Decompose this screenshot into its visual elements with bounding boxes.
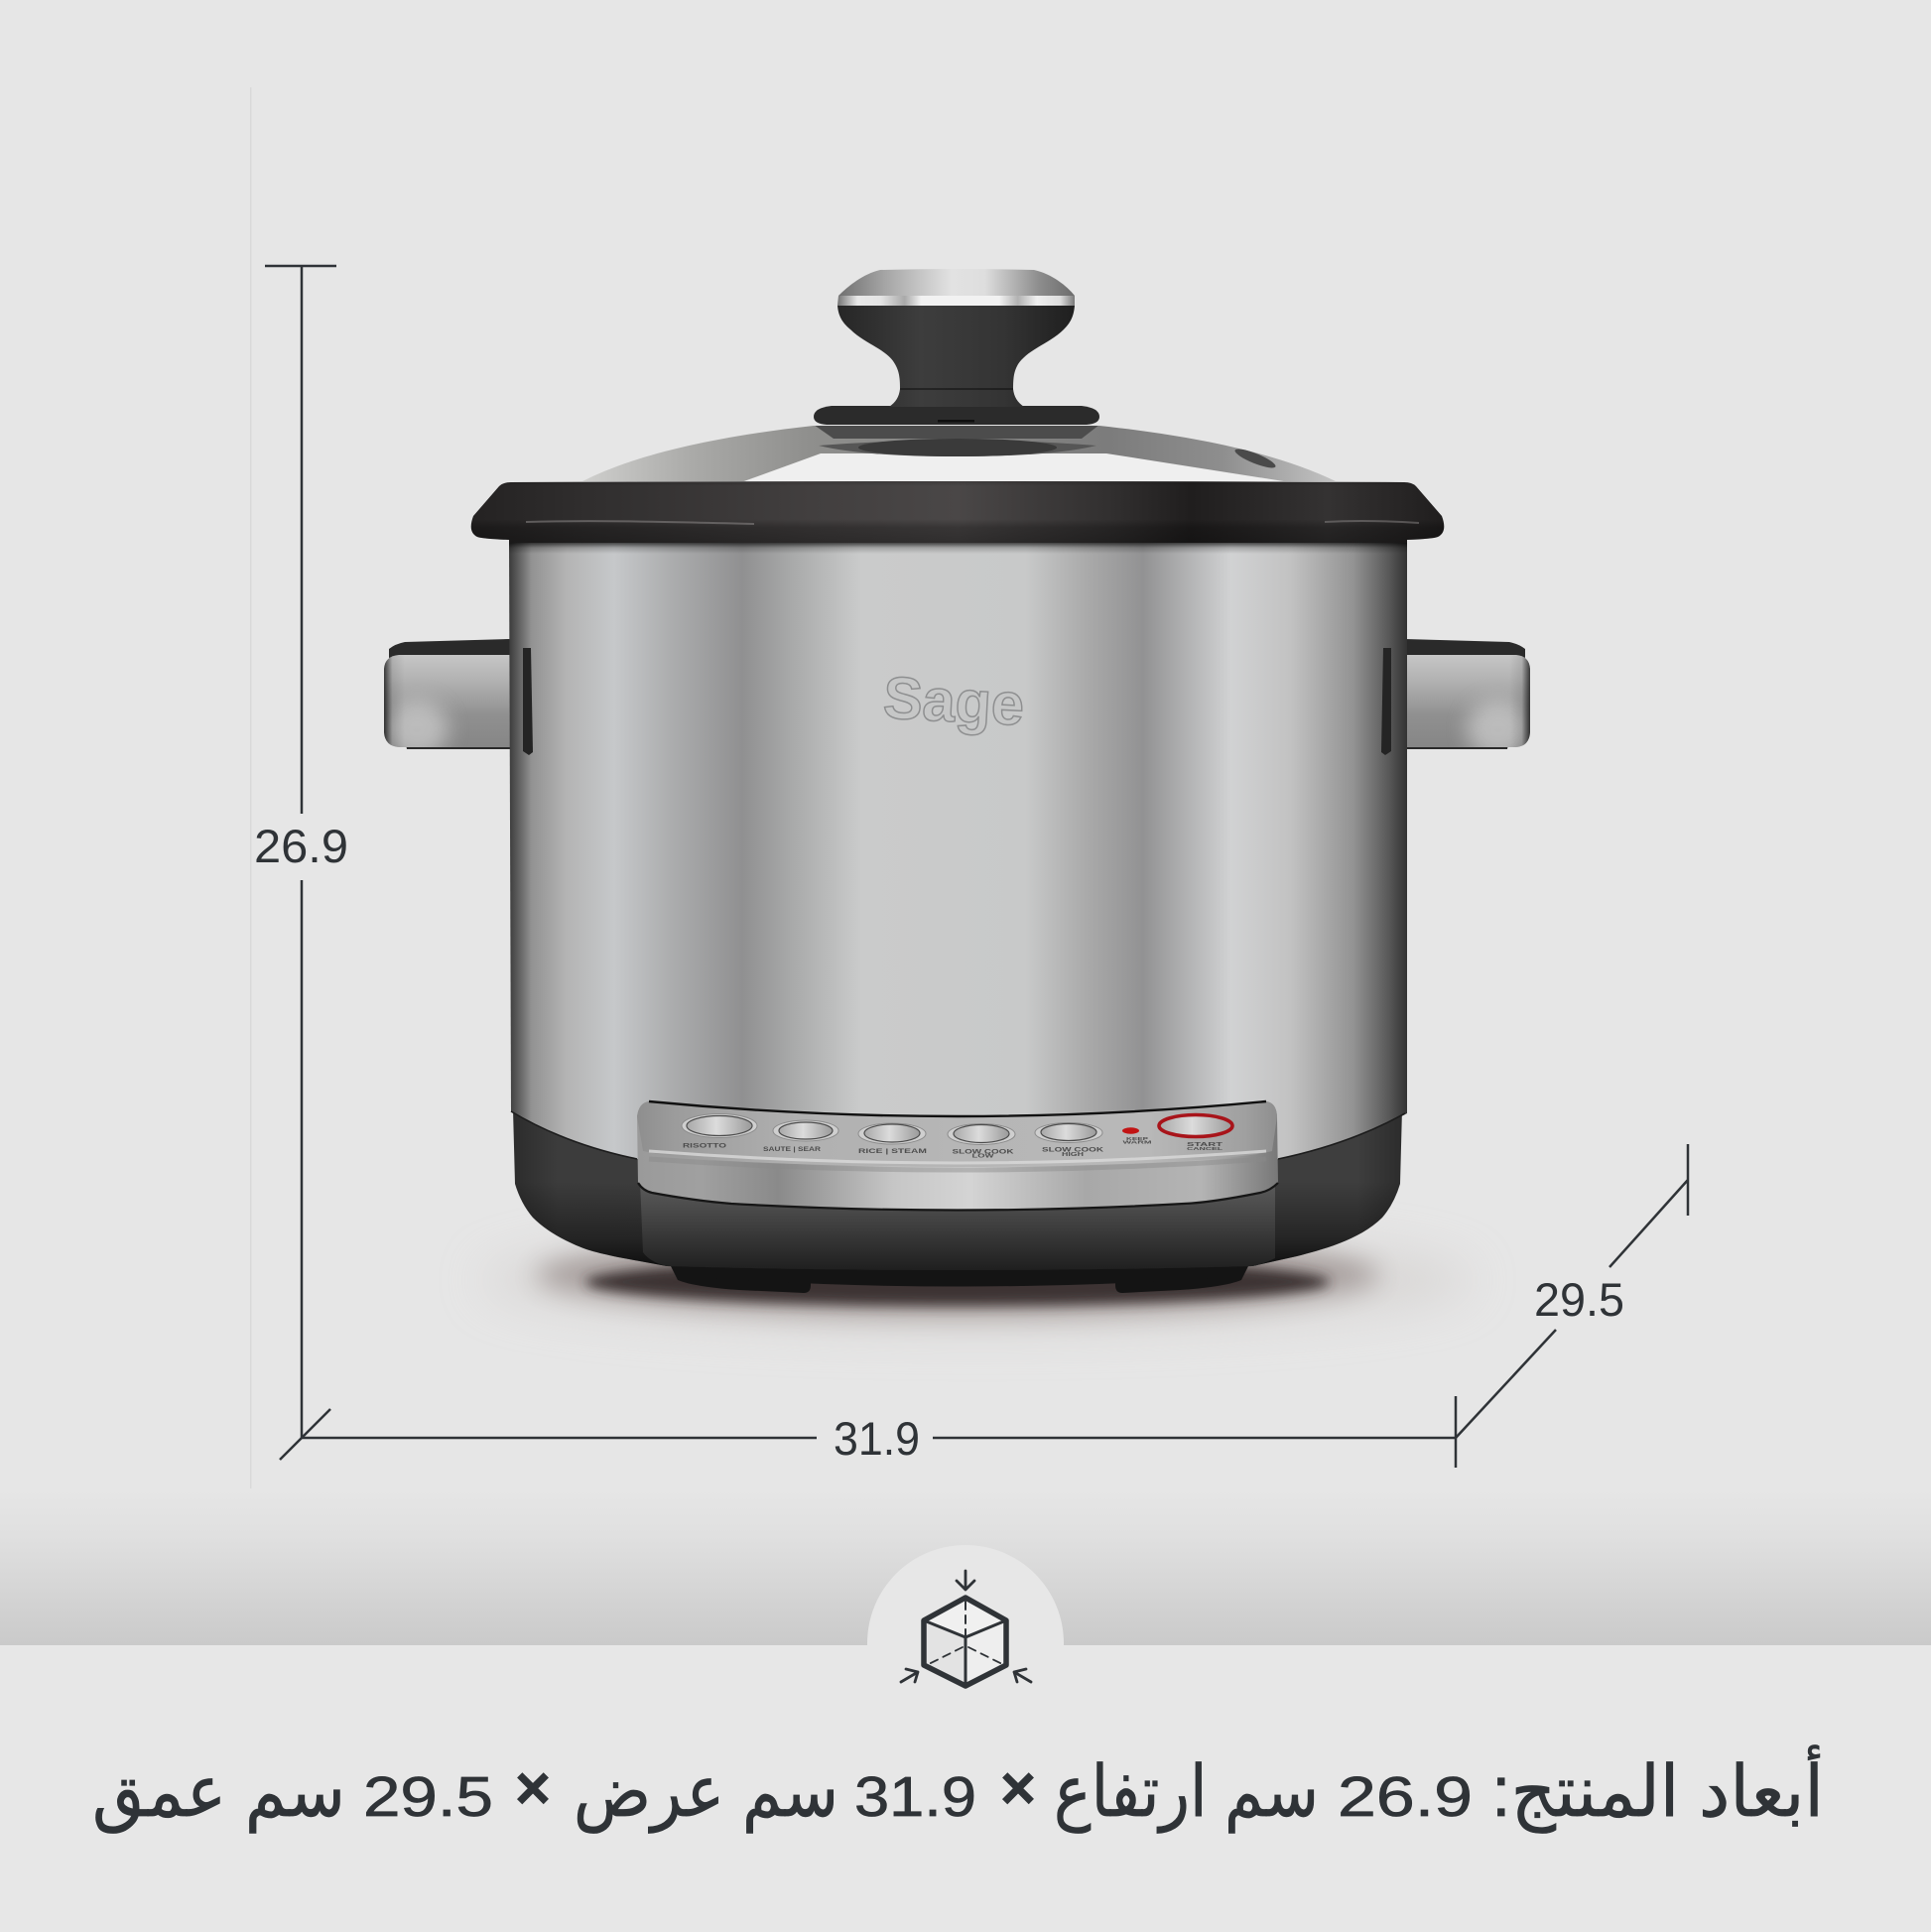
caption panel xyxy=(0,1645,1931,1932)
dimension: depth 29.5 xyxy=(280,1144,1688,1460)
dimension: height 26.9: 26.9 xyxy=(254,820,348,872)
button labels: RISOTTO xyxy=(683,1143,727,1149)
feet xyxy=(667,1258,1252,1293)
button: slow cook low xyxy=(948,1123,1015,1145)
handle joint strips xyxy=(523,648,1391,755)
lid flange xyxy=(814,406,1099,425)
button: rice steam xyxy=(858,1123,926,1144)
floor shadow xyxy=(481,1230,1474,1330)
button: saute sear xyxy=(773,1120,838,1141)
button labels: SLOW COOK xyxy=(953,1149,1015,1155)
caption: product dimensions: 29.5 xyxy=(363,1765,493,1829)
button labels: START xyxy=(1187,1142,1223,1148)
product: Sage multi cooker xyxy=(384,269,1530,1330)
button labels: CANCEL xyxy=(1187,1146,1223,1151)
control panel xyxy=(637,1101,1278,1211)
button labels xyxy=(683,1136,1223,1159)
glass lid xyxy=(582,425,1336,482)
dimension: width 31.9: 31.9 xyxy=(834,1412,920,1465)
icon: cube with inward arrows xyxy=(901,1571,1031,1686)
caption: product dimensions: × xyxy=(1000,1754,1036,1823)
bottom gradient band xyxy=(0,1488,1931,1645)
sage logo: Sage xyxy=(882,664,1026,738)
dimension: width 31.9 xyxy=(302,1396,1456,1468)
lid knob xyxy=(837,269,1075,407)
button: risotto xyxy=(682,1113,757,1137)
button: slow cook high xyxy=(1035,1123,1102,1143)
caption: product dimensions: سم عمق xyxy=(92,1752,345,1834)
button labels: WARM xyxy=(1123,1140,1152,1145)
button labels: RICE | STEAM xyxy=(858,1149,927,1155)
caption: product dimensions: 26.9 xyxy=(1338,1765,1473,1829)
button labels: LOW xyxy=(972,1153,994,1159)
lid rim xyxy=(471,481,1444,543)
caption: product dimensions: سم ارتفاع xyxy=(1054,1752,1319,1834)
faint vertical guide line xyxy=(250,87,252,1508)
caption: product dimensions: × xyxy=(515,1754,551,1823)
button labels: SLOW COOK xyxy=(1042,1147,1104,1153)
button labels: SAUTE | SEAR xyxy=(763,1147,822,1153)
indicator: keep warm xyxy=(1122,1127,1139,1134)
button labels: HIGH xyxy=(1062,1152,1085,1158)
caption: product dimensions: سم عرض xyxy=(574,1752,838,1834)
dimension: depth 29.5: 29.5 xyxy=(1534,1273,1624,1326)
caption: product dimensions: أبعاد المنتج: xyxy=(1491,1744,1824,1834)
metal body xyxy=(509,536,1407,1159)
dimension: height 26.9 xyxy=(254,266,348,1438)
icon badge xyxy=(867,1545,1064,1686)
caption: product dimensions xyxy=(92,1744,1824,1834)
left handle xyxy=(384,639,510,749)
button labels: KEEP xyxy=(1126,1136,1148,1141)
button: start cancel xyxy=(1159,1115,1232,1137)
base xyxy=(513,1109,1402,1270)
caption: product dimensions: 31.9 xyxy=(854,1765,976,1829)
right handle xyxy=(1407,639,1530,749)
